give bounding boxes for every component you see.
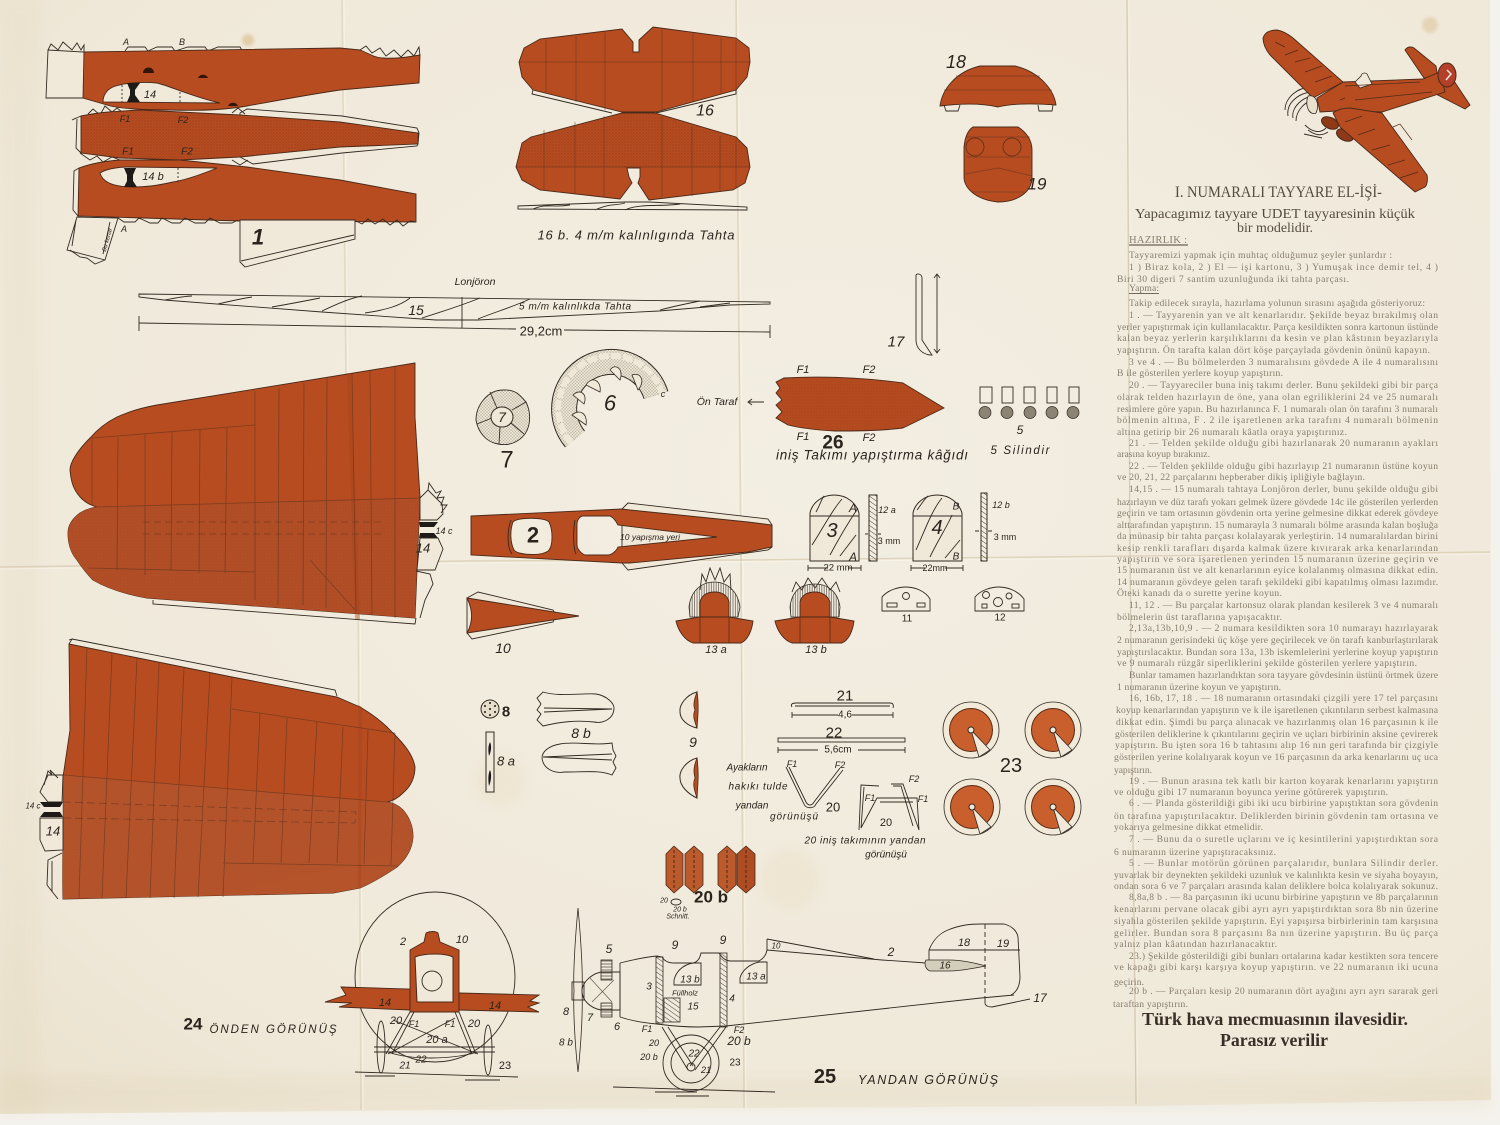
part 20 frame view — [804, 774, 928, 860]
part 26: landing gear gluing paper: F2 — [863, 432, 875, 444]
lower flaps: B — [179, 37, 185, 47]
body text: 1 ) Biraz kola, 2 ) El — işi kartonu, 3 ) Yumuşak ince demir tel, 4 ) — [1129, 262, 1438, 273]
plank 16b — [518, 202, 747, 210]
upper half — [519, 27, 750, 112]
upper wing — [68, 363, 420, 624]
upper fuselage side — [83, 48, 420, 110]
footer note — [1142, 1009, 1408, 1050]
detail lines — [1275, 42, 1432, 178]
lower wheels — [1320, 114, 1340, 132]
body text: 1 . — Tayyarenin yan ve alt kenarlarıdır. Şekilde beyaz bırakılmış olan — [1129, 310, 1438, 321]
landing gear — [662, 1027, 726, 1070]
part 12b — [975, 493, 1016, 561]
body text: arasına koyup bırakınız. — [1117, 449, 1210, 460]
part 16: wing center: 16 — [696, 102, 714, 120]
part 14 marker: 14 — [144, 89, 156, 101]
body text: 7 . — Bunu da o suretle uçlarını ve iç kesintilerini yapıştırdıktan sora — [1129, 834, 1439, 845]
part 20b — [659, 846, 755, 920]
part 8a — [486, 732, 515, 792]
part 13a: 13 a — [705, 644, 727, 656]
part 10: 10 — [495, 640, 511, 656]
part 15: longeron: Lonjöron — [455, 276, 496, 288]
body text: altına getirip bir 26 numaralı kâatla oraya yapıştırınız. — [1117, 427, 1347, 438]
part 20 side view: V strut: Ayakların — [726, 762, 768, 774]
body text: 5 . — Bunlar motörün görünen parçalarıdır, bunlara Silindir derler. — [1129, 858, 1438, 869]
labels: 13 a — [746, 972, 766, 982]
body text: bölmelerin üst taraflarına yapışacaktır. — [1117, 612, 1282, 623]
propeller whirl — [1285, 88, 1328, 138]
labels: 20 — [648, 1038, 659, 1048]
part 7: cowl front: 7 — [498, 409, 507, 425]
body text: yalnız plan kâatından hazırlanacaktır. — [1114, 939, 1277, 950]
part 4: B — [953, 502, 960, 512]
labels: 17 — [1033, 991, 1048, 1005]
part 17: wire — [888, 274, 940, 355]
body text: gösterilen deliklerine k çıkıntılarını geçirin ve uçları birbirinin aksine çevirerek — [1115, 729, 1438, 740]
middle fuselage strip (stippled) — [72, 106, 419, 165]
body text: ve 9 numaralı rüzgâr siperliklerini şekilde gösterilen yerlere yapıştırın. — [1117, 658, 1417, 669]
middle fuselage strip (stippled): F1 — [120, 114, 130, 124]
part 13b — [775, 578, 854, 656]
subtitle — [1135, 207, 1415, 236]
labels: 19 — [997, 938, 1009, 950]
caption 24 — [184, 1014, 337, 1036]
part 6: cowl ring: c — [661, 389, 666, 399]
body text: 2,13a,13b,10,9 . — 2 numara kesildikten sora 10 numarayı hazırlayarak — [1129, 623, 1438, 634]
body text: 1 numaranın üzerine koyun ve yapıştırın. — [1117, 682, 1281, 693]
body text: ve olduğu gibi 17 numaranın boyunca yerine götürerek yapıştırın. — [1114, 787, 1388, 798]
labels: 13 b — [680, 974, 700, 986]
part 5: cylinders: 5 — [1017, 423, 1024, 437]
lower flaps: A — [122, 37, 129, 47]
footer note: Türk hava mecmuasının ilavesidir. — [1142, 1009, 1408, 1029]
middle fuselage strip (stippled): F2 — [181, 146, 193, 158]
part 7: cowl front — [476, 390, 530, 474]
body text: 6 . — Planda gösterildiği gibi iki ucu birbirine yapıştıktan sora gövdenin — [1129, 798, 1438, 809]
part 20 frame view: 20 iniş takımının yandan — [804, 836, 926, 846]
top flap with teeth — [46, 42, 420, 98]
labels: F1 — [642, 1024, 652, 1034]
figure 24: front view — [325, 892, 539, 1080]
propeller — [574, 908, 582, 1072]
body text: 6 numaranın üzerine yapıştıracaksınız. — [1114, 847, 1276, 858]
part 20 side view: V strut: F2 — [835, 760, 845, 770]
body text: resimlere göre yapın. Bu hazırlanınca F. 1 numaralı olan ön tarafını 3 numaralı — [1117, 404, 1438, 415]
caption 25: YANDAN GÖRÜNÜŞ — [858, 1073, 999, 1087]
part 12: 12 — [994, 612, 1006, 624]
body text: 20 b . — Parçaları kesip 20 numaranın dört ayağını ayrı ayrı sararak geri — [1129, 986, 1438, 997]
part 1: fuselage sides — [46, 37, 420, 267]
body text: 11, 12 . — Bu parçalar kartonsuz olarak plandan kesilerek 3 ve 4 numaralı — [1129, 600, 1438, 611]
body text: yapıştırın ve sora işaretlenen yerinden 15 numaranın üzerine geçirin ve — [1117, 554, 1438, 565]
tail plane — [1426, 78, 1470, 109]
title: I. NUMARALI TAYYARE EL-İŞİ- — [1175, 184, 1382, 201]
part 20 side view: V strut: görünüşü — [770, 812, 818, 822]
body text: 3 ve 4 . — Bu bölmelerden 3 numaralısını gövdede A ile 4 numaralısını — [1129, 357, 1438, 368]
part 18 — [940, 52, 1056, 111]
part 8: spinner: 8 — [502, 704, 510, 720]
lower wing — [1333, 108, 1427, 192]
part 20 side view: V strut: 20 — [826, 800, 840, 814]
part 3: A — [848, 550, 857, 564]
part 3: 3 — [826, 520, 838, 542]
part 26: landing gear gluing paper: F1 — [797, 431, 809, 443]
labels: 6 — [614, 1021, 621, 1033]
body text: koyup kenarlarından yapıştırın ve k ile işaretlenen çıkıntıların serbest kalmasına — [1116, 705, 1439, 716]
tail — [929, 924, 1020, 995]
part 26: landing gear gluing paper: Ön Taraf — [697, 396, 738, 408]
part 20 frame view: görünüşü — [865, 850, 907, 860]
part 20 side view: V strut — [726, 759, 845, 822]
labels: 2 — [399, 936, 406, 948]
nose — [1307, 96, 1318, 114]
part 15: longeron: 5 m/m kalınlıkda Tahta — [519, 302, 631, 312]
part 11 — [882, 587, 930, 624]
figure 25: side view — [559, 908, 1048, 1096]
body text: yerler yapıştırmak için kullanılacaktır. Parça kesildikten sonra kartonun üstünde — [1117, 322, 1438, 333]
body text: B ile gösterilen yerlere koyup yapıştırın. — [1117, 368, 1283, 379]
part 4: B — [953, 552, 960, 562]
part 22: wire — [778, 724, 905, 756]
part 21: wire — [791, 688, 893, 720]
part 12 — [975, 587, 1024, 624]
part 17: wire: 17 — [888, 334, 905, 350]
labels: 20 b — [726, 1034, 751, 1048]
heading: hazırlık: HAZIRLIK : — [1129, 235, 1187, 246]
part 14c: upper wing tab: 14 c — [435, 526, 453, 536]
cowl — [410, 932, 459, 1012]
caption 25: 25 — [814, 1066, 836, 1088]
labels: 5 — [606, 942, 613, 956]
labels: 20 — [389, 1015, 403, 1027]
black semicircles — [143, 68, 238, 106]
labels: 21 — [398, 1060, 411, 1072]
part 14b marker: 14 b — [142, 171, 164, 183]
body text: Biri 30 digeri 7 santim uzunluğunda iki tahta parçası. — [1117, 274, 1349, 285]
body text: bölmenin altına, F . 2 ile işaretlenen arka tarafını 4 numaralı bölmenin — [1117, 415, 1438, 426]
part 14: lower wing tab — [25, 770, 63, 899]
struts and axle — [374, 1012, 495, 1058]
body text: gösterilen yerine kolalıyarak koyun ve 16 parçasının da arka kenarlarını uç uca — [1114, 752, 1439, 763]
icon: red airplane illustration — [1263, 30, 1470, 192]
body text: yapıştırın. — [1114, 765, 1152, 776]
labels: 10 — [772, 942, 781, 950]
part 11: 11 — [902, 614, 913, 624]
body text: olarak telden hazırlayın de öne, yana olan egriliklerini 24 ve 25 numaralı — [1117, 392, 1438, 403]
body text: kalan beyaz yerlerin karşılıklarını da kesin ve plan kâstının beyazlarıyla — [1117, 333, 1439, 344]
labels: 9 — [720, 933, 727, 947]
middle fuselage strip (stippled): F2 — [178, 115, 188, 125]
body text: siyahla gösterilen şekilde yapıştırın. Eyi yapışırsa birbirlerinin tam karşısına — [1114, 916, 1439, 927]
part 8b: propeller blades: 8 b — [571, 725, 591, 741]
body text: 14 numaranın gövdeye gelen tarafı şekildeki gibi kapatılmış olması lazımdır. — [1117, 577, 1438, 588]
part 20 side view: V strut: yandan — [735, 800, 769, 812]
part 20 frame view: F2 — [909, 774, 919, 784]
part 20 frame view: F1 — [918, 794, 928, 804]
labels — [379, 934, 511, 1072]
body text: hazırlayın ve düz tarafı yokarı gelmek üzere gövdede 14c ile gösterilen yerlerden — [1117, 497, 1438, 508]
body text — [1113, 250, 1439, 1010]
part 4: 4 — [931, 517, 943, 539]
part 14 marker — [122, 83, 180, 103]
fuselage — [1317, 72, 1445, 112]
part 8b: propeller blades — [537, 692, 616, 775]
part 20 frame view: F1 — [865, 793, 875, 803]
part 14: lower wing tab: 14 — [46, 824, 60, 838]
labels: 14 — [379, 997, 391, 1009]
subtitle: Yapacagımız tayyare UDET tayyaresinin küçük — [1135, 207, 1415, 222]
part 8a: 8 a — [497, 754, 515, 768]
labels: 10 — [456, 934, 469, 946]
rudder disc — [1438, 63, 1456, 87]
body text: alttarafından yapıştırın. 15 numarayla 3 numaralı bölme arasında kalan boşluğa — [1117, 520, 1439, 531]
part 21: wire: 4,6 — [838, 710, 852, 720]
body text: yapıştırın. Bu işten sora 16 b tahtasını alıp 16 nın geri tarafında bir çizgiyle — [1115, 740, 1438, 751]
body text: Öteki kanadı da o surette yerine koyun. — [1117, 587, 1282, 599]
part 20 side view: V strut: F1 — [787, 759, 797, 769]
part 26: landing gear gluing paper: iniş Takımı yapıştırma kâğıdı — [776, 448, 968, 462]
body text: 22 . — Telden şeklilde olduğu gibi hazırlayıp 21 numaranın üstüne koyun — [1129, 461, 1438, 472]
part 2: fuselage top: 10 yapışma yeri — [620, 532, 681, 542]
labels: F1 — [409, 1019, 419, 1029]
bulkheads — [656, 957, 663, 1023]
part 12a: 12 a — [878, 505, 896, 515]
labels: 22 — [414, 1054, 427, 1066]
body text: kesip renkli tarafları dışarda kalmak üzere kıvırarak arka kenarlarından — [1117, 543, 1438, 554]
part 14c: upper wing tab — [416, 483, 453, 618]
part 12a: 3 mm — [878, 536, 900, 546]
caption 24: 24 — [184, 1014, 203, 1034]
engine — [582, 972, 620, 1010]
labels: 2 — [887, 945, 895, 959]
body text: 21 . — Telden şekilde olduğu gibi hazırlanarak 20 numaranın ayakları — [1129, 438, 1438, 449]
body text: 20 . — Tayyareciler buna iniş takımı derler. Bunu şekildeki gibi bir parça — [1129, 380, 1439, 391]
labels: Füllholz — [672, 988, 698, 998]
lower half — [516, 113, 750, 200]
wings — [325, 987, 410, 1010]
labels: 21 — [700, 1065, 711, 1075]
body text: Tayyaremizi yapmak için muhtaç olduğumuz şeyler şunlardır : — [1129, 250, 1392, 261]
body text: gelirler. Bundan sora 8 parçasını 8a nın üzerine yapıştırın. Bu üç parça — [1114, 928, 1439, 939]
part 20b: Schnitt. — [666, 914, 690, 920]
part 20b: 20 b — [694, 888, 728, 906]
body text: yapıştırın. Ön tarafta kalan dört köşe parçaylada gövdenin önünü kapayın. — [1117, 344, 1430, 356]
part 26: landing gear gluing paper: F1 — [797, 364, 809, 376]
part 18: 18 — [946, 52, 966, 72]
part 20 frame view: 20 — [880, 817, 892, 829]
part 23: wheels: 23 — [1000, 755, 1022, 777]
labels: 16 — [939, 960, 951, 972]
part 26: landing gear gluing paper: 26 — [822, 432, 844, 454]
body text: 19 . — Bunun arasına tek katlı bir karton koyarak kenarlarını yapıştırın — [1129, 776, 1438, 787]
caption 24: ÖNDEN GÖRÜNÜŞ — [210, 1024, 337, 1036]
labels: 9 — [672, 938, 679, 952]
part 7: cowl front: 7 — [500, 446, 514, 474]
labels — [559, 933, 1048, 1075]
part 20 side view: V strut: hakıkı tulde — [728, 782, 788, 792]
body text: 14,15 . — 15 numaralı tahtaya Lonjöron derler, bunu şekilde olduğu gibi — [1129, 484, 1438, 495]
labels: 14 — [489, 1000, 501, 1012]
caption: 16 b. 4 m/m kalınlıgında Tahta — [538, 228, 734, 242]
body text: ve 20, 21, 22 parçalarını hepberaber dikiş ipliğiyle bağlayın. — [1117, 472, 1365, 483]
tail fin — [1405, 47, 1438, 78]
part 19 — [964, 127, 1047, 202]
part 26: landing gear gluing paper: F2 — [863, 364, 875, 376]
part 8: spinner — [481, 700, 510, 720]
body text: yuvarlak bir deynekten şekildeki uzunluk ve kalınlıkta kesin ve siyaha boyayın, — [1114, 870, 1438, 881]
labels: 8 b — [559, 1038, 573, 1048]
fuselage outline — [620, 950, 926, 963]
part 2: fuselage top: 2 — [527, 522, 539, 548]
part 6: cowl ring — [558, 356, 666, 443]
labels: 20 b — [639, 1052, 658, 1062]
body text: kenarlarını pervane olacak gibi ayrı ayrı yapıştırdıktan sora 8b nin üzerine — [1114, 904, 1438, 915]
body text: 2 numaranın gerisindeki üç köşe yere geçirilecek ve ön tarafı kanburlaştırılarak — [1117, 635, 1438, 646]
part 15: longeron: 15 — [408, 302, 424, 318]
part 12b: 3 mm — [994, 532, 1016, 542]
body text: 23.) Şekilde gösterildiği gibi bunları ortalarına kadar kestikten sora tencere — [1129, 951, 1438, 962]
body text: yokarıya gelmesine dikkat etmelidir. — [1114, 822, 1263, 833]
lower flaps — [67, 37, 416, 267]
part 10 — [467, 592, 579, 656]
part 16: wing center — [516, 27, 750, 242]
part 5: cylinders — [979, 387, 1079, 457]
part 12a — [865, 495, 900, 561]
body text: da münasip bir tahta parçası kolalayarak yerleştirin. 14 numaralılardan birini — [1117, 531, 1438, 542]
body text: geçirin ve tam ortasının gövdenin orta yerine gelmesine dikkat ederek gövdeye — [1117, 508, 1438, 519]
body text: ve kapağı gibi karşı karşıya koyup yapıştırın. ve 22 numaranın iki ucuna — [1114, 962, 1439, 973]
labels: 20 a — [425, 1034, 448, 1046]
lower flaps: A — [120, 224, 127, 234]
right text panel — [1113, 184, 1439, 1050]
body text: geçirin. — [1114, 977, 1144, 988]
body text: Yapma: — [1129, 283, 1159, 294]
part 4 — [911, 495, 963, 573]
upper wing — [1263, 30, 1343, 98]
labels: 15 — [687, 1002, 699, 1012]
part 20b: 20 — [659, 898, 668, 904]
part 19: 19 — [1028, 174, 1047, 194]
labels: 4 — [729, 994, 735, 1004]
labels: 7 — [587, 1012, 594, 1024]
labels: F1 — [445, 1019, 455, 1029]
body text: dikkat edin. Şimdi bu parça alınacak ve hazırlanmış olan 16 parçasının k ile — [1116, 717, 1438, 728]
caption 25 — [814, 1066, 999, 1088]
body text: 8,8a,8 b . — 8a parçasının iki ucunu birbirine yapıştırın ve 8b parçalarının — [1129, 892, 1438, 903]
part 21: wire: 21 — [837, 688, 853, 704]
part 4: 22mm — [922, 563, 948, 573]
part 14c: upper wing tab: 14 — [416, 540, 430, 556]
body text: Bunlar tamamen hazırlandıktan sora tayyare gövdesinin üstünü örtmek üzere — [1129, 670, 1438, 681]
part 2: fuselage top — [471, 503, 772, 570]
labels: 3 — [646, 982, 652, 992]
part 20b: 20 b — [672, 906, 687, 914]
lower fuselage side — [78, 160, 416, 222]
middle fuselage strip (stippled): F1 — [122, 146, 134, 158]
part 15: longeron — [139, 276, 770, 338]
part 13a — [676, 568, 753, 656]
part 15: longeron: 29,2cm — [520, 324, 562, 338]
labels: 23 — [499, 1060, 511, 1072]
part 22: wire: 22 — [826, 724, 842, 742]
subtitle: bir modelidir. — [1237, 221, 1313, 236]
labels: 20 — [467, 1018, 481, 1030]
body text: 16, 16b, 17, 18 . — 18 numaranın ortasındaki çizgili yere 17 tel parçasını — [1129, 693, 1438, 704]
part 22: wire: 5,6cm — [824, 744, 852, 756]
body text: ondan sora 6 ve 7 parçaları arasında kalan deliklere bolca kolalıyarak sokunuz. — [1114, 881, 1438, 892]
body text: Takip edilecek sırayla, hazırlama yolunun sırasını aşağıda gösteriyoruz: — [1129, 298, 1425, 309]
part 9: windshields: 9 — [689, 734, 697, 750]
part 13b: 13 b — [805, 644, 827, 656]
body text: ön tarafına yapıştırılacaktır. Deliklerden birinin gövdenin tam ortasına ve — [1114, 811, 1438, 822]
part 26: landing gear gluing paper — [697, 364, 968, 462]
part 5: cylinders: 5 Silindir — [990, 445, 1051, 457]
part 12b: 12 b — [992, 500, 1010, 510]
part 6: cowl ring: 6 — [604, 390, 617, 416]
part 3 — [808, 495, 861, 574]
footer note: Parasız verilir — [1220, 1030, 1328, 1050]
labels: 23 — [729, 1058, 741, 1068]
lower wing — [63, 639, 415, 899]
body text: yapıştırılacaktır. Bundan sora 13a, 13b iskemlelerini yerlerine koyup yapıştırın — [1117, 647, 1438, 658]
labels: 8 — [563, 1006, 570, 1018]
labels: F2 — [734, 1025, 744, 1035]
labels: 22 — [687, 1048, 700, 1060]
part 14b marker — [124, 168, 178, 187]
part 23: wheels — [943, 702, 1081, 835]
lower flaps: Bu kenar — [102, 227, 114, 252]
part 3: 22 mm — [823, 562, 853, 574]
label 1: 1 — [252, 224, 264, 250]
pilot — [1355, 73, 1372, 88]
labels: 18 — [958, 937, 971, 949]
body text: taraftan yapıştırın. — [1113, 999, 1188, 1010]
part 3: A — [848, 501, 857, 515]
part 14: lower wing tab: 14 c — [25, 802, 41, 810]
part 9: windshields — [680, 692, 698, 798]
body text: 15 numaranın üst ve alt kenarlarının eyice kolalanmış olmasına dikkat edin. — [1117, 565, 1438, 576]
